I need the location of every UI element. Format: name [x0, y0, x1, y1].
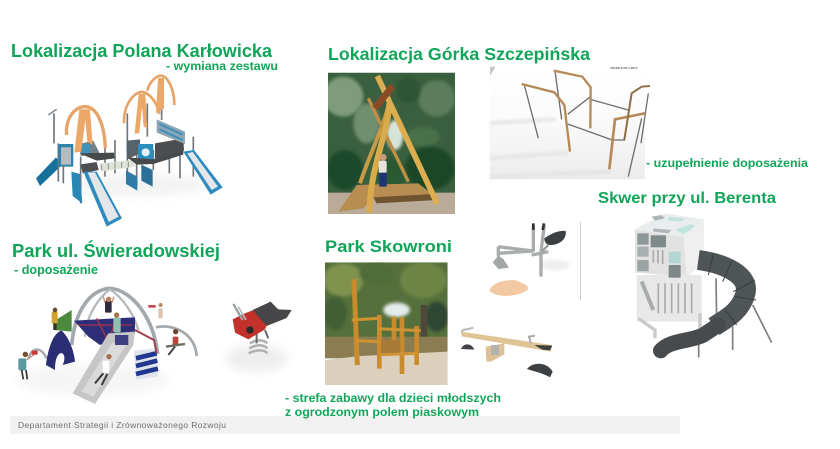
subtitle: uzupełnienie doposażenia: - uzupełnienie doposażenia — [646, 156, 808, 170]
subtitle: strefa zabawy — [285, 391, 501, 419]
illustration: wooden balance frames — [490, 67, 650, 179]
title: Lokalizacja Górka Szczepińska: Lokalizacja Górka Szczepińska — [328, 44, 590, 64]
illustration: ladybird spring rider — [225, 302, 292, 372]
title: Park Skowroni: Park Skowroni — [325, 237, 452, 256]
illustration: seesaw — [461, 328, 553, 377]
subtitle: doposażenie: - doposażenie — [14, 263, 98, 277]
title: Lokalizacja Polana Karłowicka: Lokalizacja Polana Karłowicka — [11, 41, 273, 61]
illustration: sand digger — [489, 223, 570, 296]
photo: wooden climbing structure — [323, 73, 455, 214]
caption: tiny drawing note: PN-EN 1176-1:2017 — [610, 66, 638, 70]
subtitle: strefa zabawy: - strefa zabawy dla dzieci młodszych — [285, 391, 501, 405]
illustration: playground with children — [17, 288, 197, 404]
divider — [580, 222, 581, 300]
photo: wooden play tower in park — [323, 262, 448, 385]
footer bar — [10, 416, 680, 434]
subtitle: wymiana zestawu: - wymiana zestawu — [166, 59, 278, 73]
title: Park ul. Świeradowskiej: Park ul. Świeradowskiej — [12, 240, 220, 261]
footer text: Departament Strategii i Zrównoważonego Rozwoju — [18, 420, 226, 430]
illustration: playground Polana Karłowicka — [36, 76, 223, 227]
illustration: tower with tube slide — [635, 213, 772, 357]
title: Skwer przy ul. Berenta: Skwer przy ul. Berenta — [598, 190, 776, 207]
subtitle: strefa zabawy: z ogrodzonym polem piaskowym — [285, 405, 479, 419]
